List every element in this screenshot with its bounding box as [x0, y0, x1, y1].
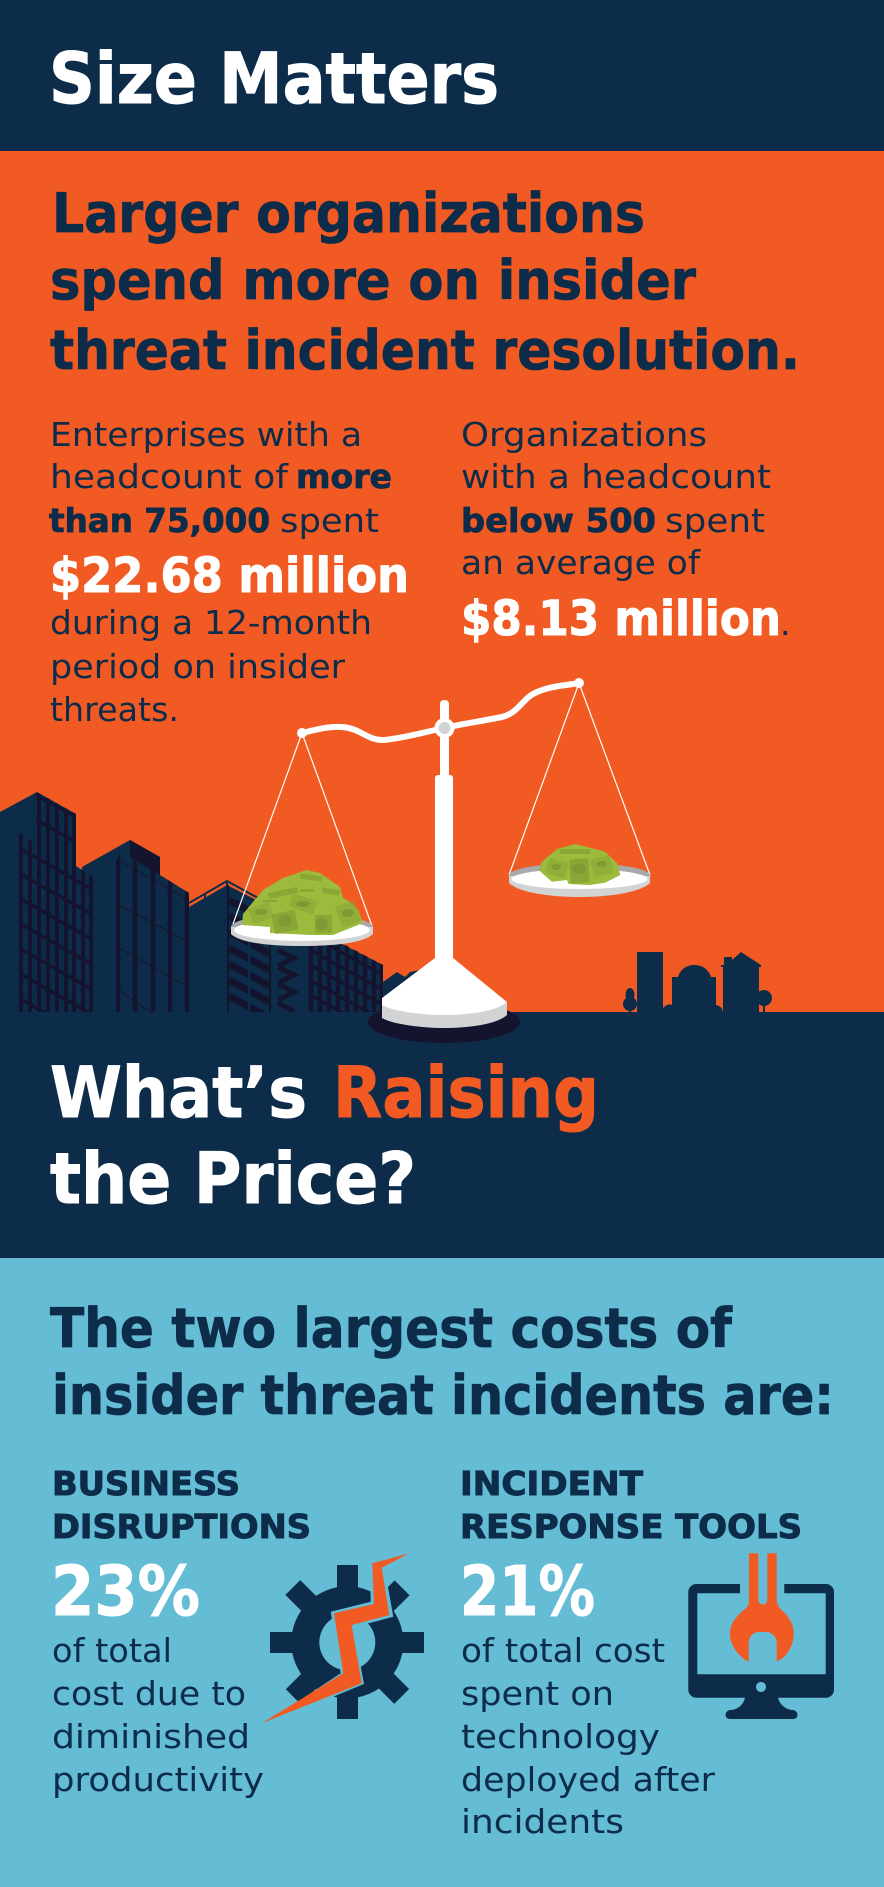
column heading: business disruptions: BUSINESS — [52, 1464, 240, 1503]
text block: technology after incidents: technology — [461, 1717, 660, 1756]
heading: what's raising the price — [50, 1052, 599, 1220]
left pan — [231, 914, 373, 946]
text block: enterprises over 75,000: Enterprises with a — [50, 415, 362, 454]
heading: two largest costs — [50, 1297, 834, 1427]
text block: enterprises over 75,000: during a 12-month — [50, 603, 372, 642]
string set left — [233, 733, 372, 926]
heading: two largest costs: insider threat incidents are: — [52, 1364, 834, 1427]
icon: monitor with wrench — [688, 1553, 834, 1719]
heading: what's raising the price: the Price? — [50, 1138, 416, 1220]
beam — [302, 683, 579, 740]
illustration: city skyline left — [0, 792, 419, 1012]
text block: organizations below 500: Organizations — [461, 415, 707, 454]
text block: organizations below 500: . — [780, 604, 790, 643]
text block: enterprises over 75,000: period on insider — [50, 647, 345, 686]
right pan — [508, 863, 650, 897]
column heading: business disruptions — [52, 1464, 311, 1546]
title: Size Matters: Size Matters — [49, 38, 499, 120]
text block: technology after incidents: of total cost — [461, 1631, 665, 1670]
heading: what's raising the price: Raising — [333, 1052, 599, 1134]
string set right — [509, 683, 650, 875]
pivot — [434, 718, 454, 738]
text block: enterprises over 75,000: than 75,000 — [49, 501, 270, 540]
text block: technology after incidents — [461, 1631, 715, 1841]
text block: organizations below 500: spent — [665, 501, 765, 540]
column heading: business disruptions: DISRUPTIONS — [52, 1507, 311, 1546]
column heading: incident response tools: INCIDENT — [460, 1464, 643, 1503]
heading: larger organizations — [50, 182, 800, 382]
panel: two largest costs — [0, 1258, 884, 1887]
text block: enterprises over 75,000: spent — [280, 501, 379, 540]
base — [382, 998, 507, 1028]
heading: larger organizations: threat incident resolution. — [50, 319, 800, 382]
text block: organizations below 500: an average of — [461, 543, 701, 582]
text block: enterprises over 75,000: $22.68 million — [50, 548, 409, 604]
text block: diminished productivity: cost due to — [52, 1674, 246, 1713]
heading: what's raising the price: What’s — [50, 1052, 307, 1134]
text block: diminished productivity: productivity — [52, 1760, 264, 1799]
base shadow — [368, 1001, 520, 1043]
money pile right — [539, 844, 620, 885]
text block: enterprises over 75,000: headcount of — [50, 457, 289, 496]
text block: organizations below 500 — [461, 415, 790, 647]
heading: larger organizations: spend more on insider — [50, 249, 696, 312]
column heading: incident response tools: RESPONSE TOOLS — [460, 1507, 802, 1546]
heading: larger organizations: Larger organizations — [52, 182, 645, 245]
text block: organizations below 500: with a headcount — [461, 457, 771, 496]
panel: what's raising the price — [0, 1012, 884, 1258]
beam end caps — [297, 728, 307, 738]
heading: two largest costs: The two largest costs of — [50, 1297, 732, 1360]
text block: enterprises over 75,000: threats. — [50, 690, 179, 729]
text block: diminished productivity: diminished — [52, 1717, 250, 1756]
column — [440, 700, 449, 780]
stat: 21%: 21% — [460, 1552, 595, 1632]
panel: size comparison — [0, 151, 884, 1012]
text block: technology after incidents: incidents — [461, 1802, 624, 1841]
text block: technology after incidents: deployed after — [461, 1760, 715, 1799]
text block: diminished productivity — [52, 1631, 264, 1799]
text block: organizations below 500: below 500 — [461, 501, 656, 540]
illustration: balance scale — [231, 678, 650, 1043]
text block: enterprises over 75,000 — [49, 415, 409, 729]
money pile left — [242, 870, 363, 935]
text block: diminished productivity: of total — [52, 1631, 172, 1670]
text block: enterprises over 75,000: more — [296, 457, 392, 496]
stat: 23%: 23% — [51, 1552, 200, 1632]
text block: technology after incidents: spent on — [461, 1674, 614, 1713]
text block: organizations below 500: $8.13 million — [461, 591, 781, 647]
panel: header band — [0, 0, 884, 151]
column heading: incident response tools — [460, 1464, 802, 1546]
illustration: town skyline right — [623, 952, 772, 1013]
icon: broken gear with lightning bolt — [260, 1553, 424, 1727]
